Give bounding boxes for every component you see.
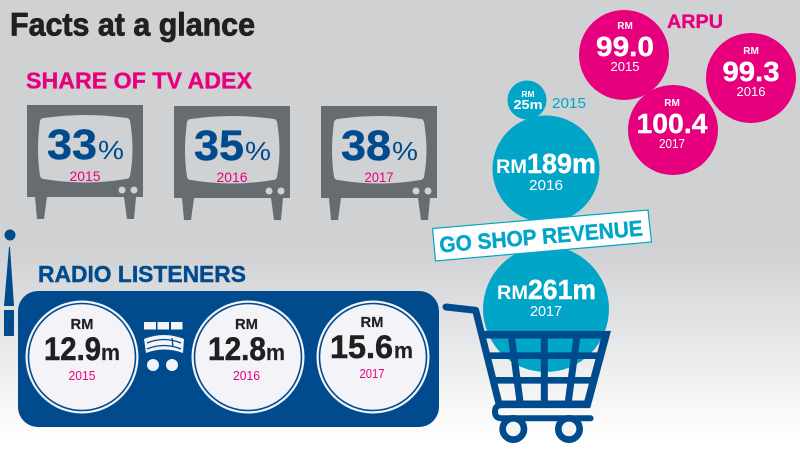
heading: radio listeners: RADIO LISTENERS (38, 261, 246, 287)
circle: 2017: RM (360, 314, 384, 331)
panel: TV 2017 (321, 106, 437, 220)
panel: TV 2017: 38 (341, 122, 391, 170)
panel: radio listeners (18, 291, 439, 427)
bubble: Go Shop 2016 (492, 116, 600, 222)
panel: TV 2015: % (98, 135, 124, 165)
circle: 2016: 2016 (233, 368, 260, 383)
bubble: ARPU 2015: 99.0 (596, 31, 654, 62)
bubble: ARPU 2017: 2017 (659, 136, 685, 151)
banner: Go Shop revenue: GO SHOP REVENUE (438, 215, 644, 257)
bubble: Go Shop 2015: RM (521, 89, 535, 99)
icon: shopping cart (446, 307, 606, 440)
circle: 2017: m (394, 338, 413, 363)
bubble: ARPU 2016 (706, 33, 796, 123)
circle: 2015: RM (70, 316, 94, 333)
bubble: Go Shop 2016: 2016 (529, 177, 563, 194)
circle: 2015: m (101, 340, 120, 365)
panel: TV 2016: % (245, 136, 271, 166)
circle: 2016 (192, 300, 304, 414)
circle: 2017 (316, 300, 430, 414)
bubble: Go Shop 2015: 25m (514, 97, 542, 112)
bubble: ARPU 2015: 2015 (610, 59, 640, 74)
bubble: ARPU 2015: RM (617, 21, 633, 32)
bubble: ARPU 2017: 100.4 (636, 108, 708, 139)
panel: TV 2016 (174, 106, 290, 220)
circle: 2015 (26, 300, 138, 414)
circle: 2016: 12.8 (208, 331, 266, 367)
circle: 2015: 12.9 (44, 331, 101, 367)
panel: TV 2015 (27, 105, 143, 219)
bubble: ARPU 2017 (628, 85, 718, 175)
circle: 2016: RM (235, 316, 258, 333)
icon: radio antenna (4, 230, 16, 336)
bubble: Go Shop 2017 (483, 246, 609, 372)
bubble: Go Shop 2017: 2017 (530, 303, 562, 320)
bubble: ARPU 2016: 2016 (736, 84, 766, 99)
heading: share of TV adex: SHARE OF TV ADEX (26, 68, 252, 94)
panel: TV 2015: 33 (47, 121, 97, 169)
panel: TV 2017: 2017 (364, 169, 394, 185)
bubble: Go Shop 2016: 189m (527, 148, 596, 179)
circle: 2016: m (266, 340, 285, 365)
circle: 2017: 2017 (360, 366, 384, 381)
panel: TV 2015: 2015 (70, 168, 101, 184)
panel: TV 2016: 2016 (216, 169, 248, 185)
bubble: Go Shop 2016: RM (496, 157, 527, 178)
circle: 2015: 2015 (68, 368, 96, 383)
panel: TV 2016: 35 (194, 122, 244, 170)
bubble: ARPU 2016: RM (743, 46, 759, 57)
label: Go Shop 2015 year: 2015 (552, 95, 586, 112)
bubble: Go Shop 2017: 261m (528, 274, 596, 305)
heading: ARPU: ARPU (667, 12, 723, 33)
bubble: Go Shop 2017: RM (497, 283, 528, 304)
bubble: ARPU 2016: 99.3 (722, 56, 780, 87)
title: Facts at a glance (10, 6, 255, 42)
icon: radio dial (144, 322, 184, 371)
bubble: ARPU 2017: RM (664, 98, 680, 109)
bubble: ARPU 2015 (579, 10, 669, 100)
circle: 2017: 15.6 (330, 329, 393, 365)
panel: TV 2017: % (392, 136, 418, 166)
bubble: Go Shop 2015 (508, 80, 546, 120)
